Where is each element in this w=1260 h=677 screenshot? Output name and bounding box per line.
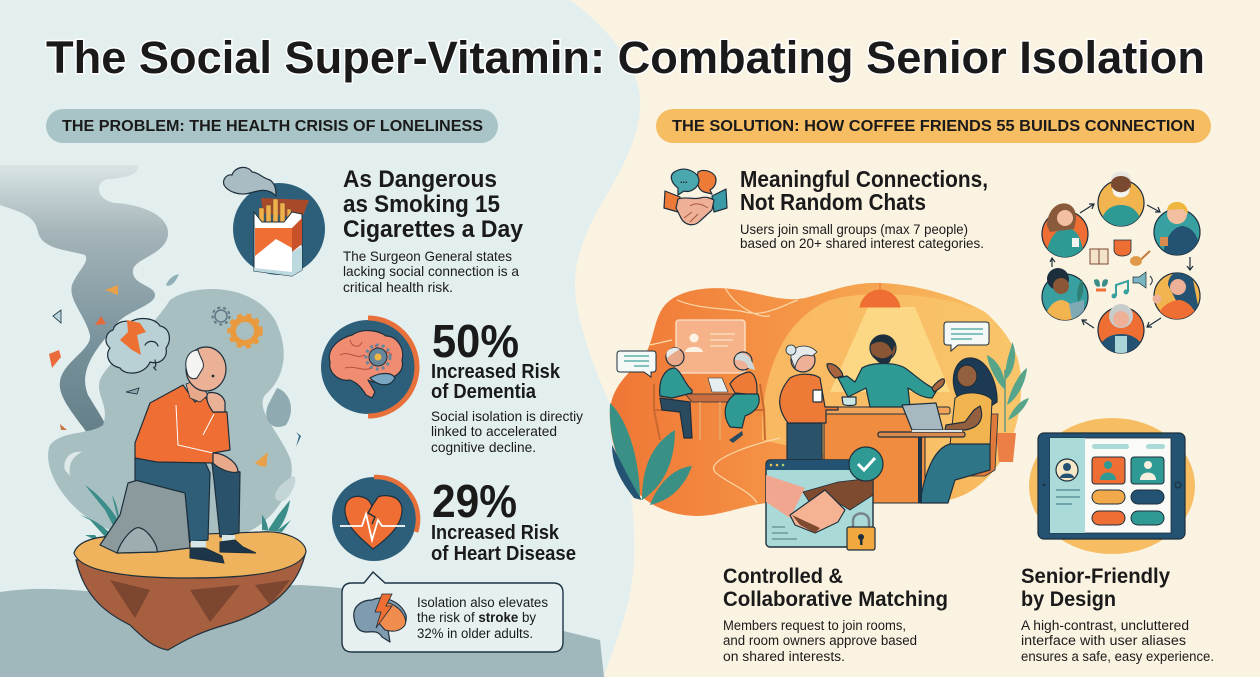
front leg	[135, 458, 210, 542]
stat number: 50%	[432, 315, 519, 367]
man in teal	[827, 335, 944, 407]
icon: speech bubbles and handshake: ...	[680, 175, 688, 185]
avatar: grey-haired woman	[1096, 304, 1146, 354]
feature body: on shared interests.	[723, 649, 845, 664]
feature heading	[740, 166, 988, 215]
stat 1: smoking	[224, 166, 524, 295]
broken thought icon	[106, 319, 169, 373]
stat heading: Increased Risk	[431, 521, 560, 544]
woman at laptop	[920, 358, 998, 503]
stat body: cognitive decline.	[431, 439, 536, 455]
icon: senior-friendly tablet	[1029, 418, 1195, 554]
avatar: woman with brown hair	[1042, 203, 1088, 258]
seated rock	[100, 480, 190, 553]
callout text: the risk of stroke by	[417, 610, 536, 625]
stat heading: As Dangerous	[343, 166, 497, 193]
callout text: 32% in older adults.	[417, 626, 533, 641]
heading pill: the solution	[656, 109, 1211, 143]
feature body: based on 20+ shared interest categories.	[740, 235, 984, 251]
grey haze behind figure	[48, 289, 292, 534]
feature body	[723, 618, 917, 664]
feature body: and room owners approve based	[723, 633, 917, 648]
callout text	[417, 595, 548, 641]
callout text: Isolation also elevates	[417, 595, 548, 610]
background couple at table	[654, 320, 765, 443]
feature heading: Meaningful Connections,	[740, 166, 988, 192]
stat heading: Increased Risk	[431, 360, 561, 383]
feature body: Members request to join rooms,	[723, 618, 906, 633]
floating rock island	[74, 532, 306, 650]
ceiling lamp	[860, 283, 900, 307]
feature body	[740, 221, 984, 251]
thinking gears	[212, 308, 261, 347]
smoke cloud	[0, 165, 168, 476]
stat heading: of Heart Disease	[431, 542, 576, 565]
shared interest icons	[1090, 240, 1152, 298]
stat body	[431, 408, 583, 455]
hand on knee	[213, 453, 238, 472]
icon: brain with gear	[321, 318, 417, 416]
avatar: bearded man	[1098, 172, 1144, 226]
stat body: critical health risk.	[343, 279, 453, 295]
heading pill: the problem	[46, 109, 498, 143]
plant left	[610, 403, 692, 505]
icon: broken heart	[332, 477, 418, 561]
illustration: circle of friends	[1042, 172, 1200, 354]
title: The Social Super-Vitamin: Combating Senior Isolation	[46, 32, 1205, 83]
stat body: lacking social connection is a	[343, 263, 519, 279]
grass tufts	[80, 485, 291, 542]
wall and floor lines	[650, 288, 798, 503]
stat 2: dementia	[321, 315, 583, 455]
stat heading	[431, 521, 576, 565]
illustration: cafe scene	[610, 283, 1029, 516]
plant right	[987, 342, 1029, 462]
feature heading: Senior-Friendly	[1021, 565, 1170, 588]
scene blob	[610, 283, 1021, 516]
arrows between avatars	[1050, 204, 1193, 328]
counter	[820, 407, 950, 503]
head	[186, 347, 226, 412]
speech bubble right	[944, 322, 989, 351]
stat heading	[431, 360, 561, 403]
feature 3: senior-friendly by design	[1021, 565, 1214, 664]
feature body: ensures a safe, easy experience.	[1021, 649, 1214, 664]
avatar: woman with long hair	[1152, 271, 1200, 320]
stat heading	[343, 166, 524, 243]
stat heading: as Smoking 15	[343, 191, 500, 218]
illustration: isolated senior on an island	[0, 165, 306, 650]
avatar: young man with plant	[1042, 268, 1088, 322]
stat body: Social isolation is directiy	[431, 408, 583, 424]
stat number: 29%	[432, 475, 517, 527]
coffee cup on counter	[842, 397, 856, 406]
stat body	[343, 248, 519, 295]
stat body: The Surgeon General states	[343, 248, 512, 264]
speech bubble left	[617, 351, 656, 377]
back leg	[212, 463, 240, 537]
callout: stroke risk	[342, 572, 563, 652]
feature body: Users join small groups (max 7 people)	[740, 221, 968, 237]
woman with coffee	[780, 345, 838, 460]
feature body: interface with user aliases	[1021, 633, 1186, 648]
feature heading	[723, 565, 948, 611]
feature heading: Controlled &	[723, 565, 843, 588]
feature 1: meaningful connections	[664, 166, 988, 251]
lighter cafe wall	[762, 294, 1021, 470]
stat heading: of Dementia	[431, 380, 537, 403]
feature heading: by Design	[1021, 588, 1116, 611]
feature heading	[1021, 565, 1170, 611]
avatar: blond man	[1154, 202, 1200, 256]
laptop and table	[878, 403, 965, 503]
falling shards	[49, 274, 301, 467]
stat body: linked to accelerated	[431, 423, 557, 439]
icon: speech bubbles and handshake	[664, 169, 727, 225]
stat 3: heart disease	[332, 475, 576, 565]
icon: cigarette pack	[224, 167, 325, 276]
icon: brain with lightning	[354, 594, 406, 642]
socks	[191, 535, 235, 550]
lamp light cone	[830, 307, 950, 392]
icon: secure handshake window	[766, 447, 883, 550]
shoes	[190, 540, 256, 563]
feature heading: Collaborative Matching	[723, 588, 948, 611]
heading pill: the solution: THE SOLUTION: HOW COFFEE FRIENDS 55 BUILDS CONNECTION	[672, 118, 1195, 135]
feature body: A high-contrast, uncluttered	[1021, 618, 1189, 633]
feature heading: Not Random Chats	[740, 189, 926, 215]
heading pill: the problem: THE PROBLEM: THE HEALTH CRISIS OF LONELINESS	[62, 118, 483, 135]
stat heading: Cigarettes a Day	[343, 216, 524, 243]
feature 2: controlled matching	[723, 565, 948, 664]
torso and arm	[135, 385, 230, 463]
feature body	[1021, 618, 1214, 664]
